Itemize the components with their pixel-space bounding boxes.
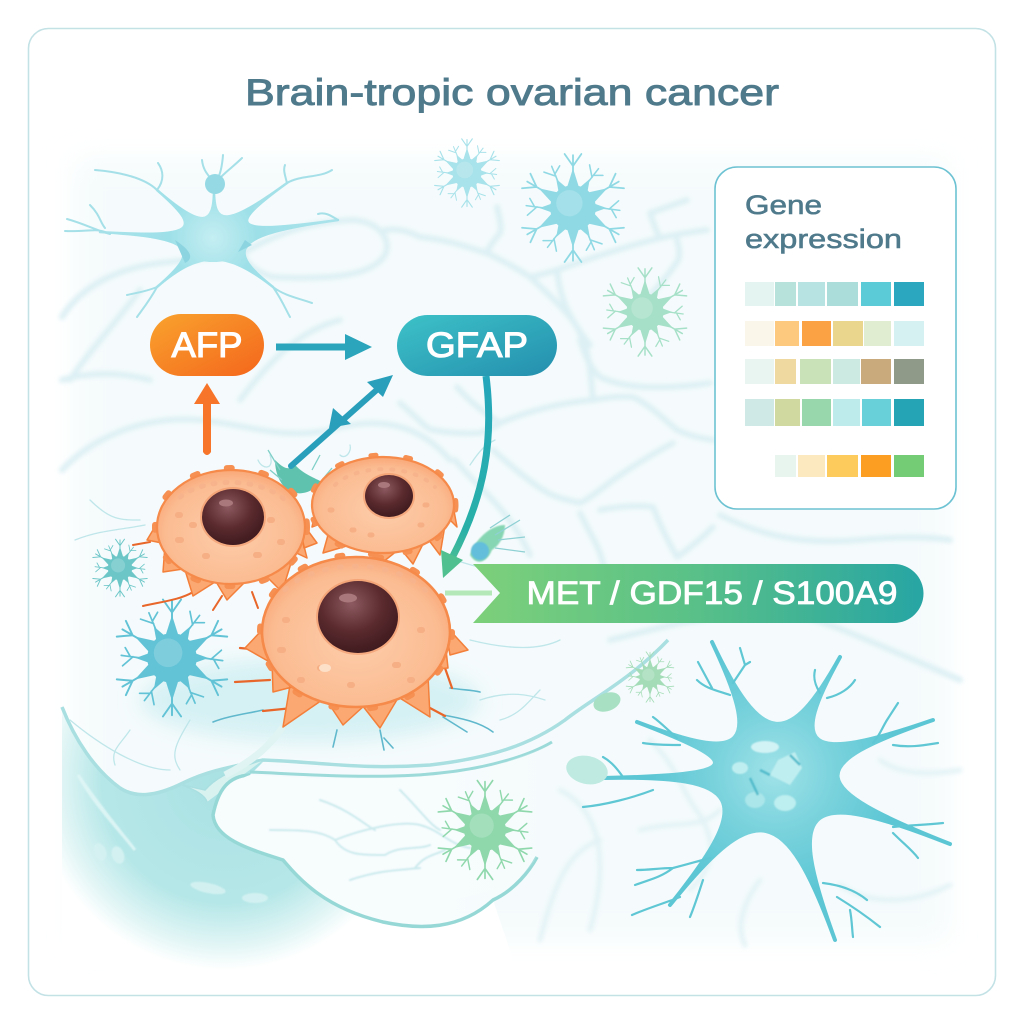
title: Brain-tropic ovarian cancer: [245, 72, 779, 113]
green microglia: lower: [438, 780, 532, 880]
legend heading: Gene: [745, 190, 822, 220]
heatmap row 5: [775, 455, 924, 477]
teal glia right of cells: [470, 515, 525, 562]
MET GDF15 S100A9 banner: MET / GDF15 / S100A9: [526, 575, 898, 611]
astrocyte: small left: [93, 539, 147, 597]
astrocyte: small top right: [522, 154, 624, 262]
arrow: tumor to GFAP: [291, 375, 393, 466]
panel: gene expression legend: [715, 167, 956, 509]
arrow: tumor to AFP: [194, 383, 220, 455]
legend heading: expression: [745, 224, 902, 254]
astrocyte: top left: [65, 155, 338, 317]
astrocyte: large bottom right: [564, 642, 950, 940]
astrocyte: small top: [435, 139, 499, 207]
teal glia behind cells: [268, 450, 332, 493]
arrow: GFAP to MET group: [441, 376, 489, 578]
tumor cell: upper left: [133, 468, 317, 610]
AFP label: AFP: [172, 326, 242, 365]
green microglia with process: [591, 652, 674, 715]
background brain tissue: [62, 160, 960, 945]
astrocyte: left: [117, 600, 227, 716]
GFAP label: [397, 315, 557, 376]
tumor cell: upper right: [310, 455, 457, 564]
GFAP label: GFAP: [426, 326, 528, 365]
heatmap row 4: [745, 399, 924, 426]
heatmap row 1: [745, 282, 924, 306]
AFP label: [150, 314, 264, 376]
pale cast beneath tumor cells: [140, 658, 480, 742]
arrow: AFP to GFAP: [276, 334, 372, 360]
heatmap row 3: [745, 359, 924, 384]
green microglia: upper: [603, 268, 687, 356]
legend heading: [745, 190, 902, 254]
heatmap row 2: [745, 321, 924, 346]
MET GDF15 S100A9 banner: [445, 564, 924, 623]
tumor cell: front: [213, 555, 493, 750]
faint veins around tumor cells: [70, 440, 560, 770]
tissue fold: [62, 640, 668, 970]
